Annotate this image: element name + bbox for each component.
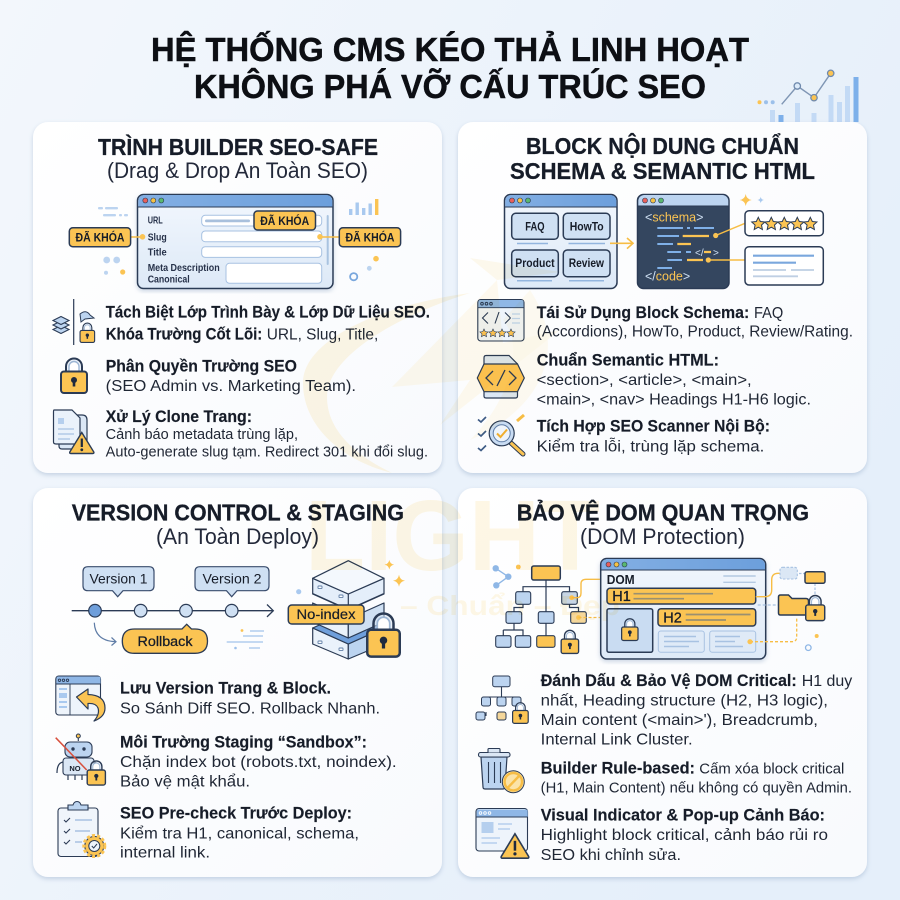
chart decoration: top right bbox=[758, 70, 858, 122]
icon: trash with prohibition bbox=[478, 748, 524, 793]
illustration: version timeline bbox=[72, 567, 273, 653]
illustration: locked SEO fields window: URL bbox=[148, 214, 163, 226]
text: builder rule-based bbox=[541, 759, 852, 797]
text: chuẩn semantic: <main>, <nav> Headings H1-H6 logic. bbox=[537, 391, 811, 408]
heading: panel 2: SCHEMA & SEMANTIC HTML bbox=[510, 158, 815, 184]
illustration: no-index server bbox=[288, 560, 405, 659]
text: phân quyền: (SEO Admin vs. Marketing Team). bbox=[106, 378, 356, 395]
text: tái sử dụng block: FAQ bbox=[754, 305, 783, 322]
icon: server lock bbox=[367, 614, 400, 657]
text: đánh dấu dom critical bbox=[541, 672, 852, 748]
bubble: version 2 bbox=[195, 567, 269, 597]
heading: panel 2: BLOCK NỘI DUNG CHUẨN bbox=[526, 132, 799, 159]
illustration: locked SEO fields window: Meta Description bbox=[148, 262, 220, 274]
heading: panel 3: VERSION CONTROL & STAGING bbox=[72, 500, 404, 526]
text: môi trường staging: Bảo vệ mật khẩu. bbox=[120, 773, 250, 791]
item: đánh dấu dom critical bbox=[476, 672, 852, 748]
block: h2: H2 bbox=[663, 610, 682, 626]
item: tích hợp scanner bbox=[478, 415, 770, 456]
block window: FAQ bbox=[525, 220, 545, 234]
text preview box bbox=[745, 247, 823, 285]
bubble: version 2: Version 2 bbox=[202, 571, 262, 586]
text: builder rule-based: (H1, Main Content) nếu không có quyền Admin. bbox=[541, 781, 852, 797]
button: rollback bbox=[122, 624, 208, 653]
text: tái sử dụng block: (Accordions), HowTo, Product, Review/Rating. bbox=[537, 324, 853, 341]
text: đánh dấu dom critical: Internal Link Cluster. bbox=[541, 731, 693, 748]
badge: no-index: No-index bbox=[296, 607, 356, 622]
text: lưu version bbox=[120, 679, 380, 717]
text: tích hợp scanner: Kiểm tra lỗi, trùng lặp schema. bbox=[537, 437, 764, 456]
block window: Review bbox=[569, 256, 605, 270]
title: HỆ THỐNG CMS KÉO THẢ LINH HOẠT bbox=[151, 30, 749, 68]
illustration: locked SEO fields window: Title bbox=[148, 246, 167, 258]
title bbox=[151, 30, 749, 105]
code window: </ bbox=[695, 248, 704, 259]
text: xử lý clone: Xử Lý Clone Trang: bbox=[106, 408, 252, 426]
illustration: protected folder bbox=[747, 567, 825, 650]
block: h1 bbox=[607, 588, 756, 605]
icon: schema window bbox=[478, 300, 524, 341]
text: xử lý clone: Auto-generate slug tạm. Redirect 301 khi đổi slug. bbox=[106, 445, 428, 461]
code window: > bbox=[713, 248, 719, 259]
icon: blocked robot with lock: NO bbox=[69, 764, 81, 773]
heading: panel 2 bbox=[510, 132, 815, 184]
item: lưu version bbox=[56, 676, 380, 721]
icon: window with undo arrow bbox=[56, 676, 105, 721]
icon: blocked robot with lock bbox=[56, 734, 105, 785]
illustration: schema blocks to code bbox=[504, 194, 823, 288]
text: phân quyền bbox=[106, 358, 356, 395]
text: visual indicator: Visual Indicator & Pop-up Cảnh Báo: bbox=[541, 806, 825, 824]
text: seo pre-check bbox=[120, 804, 359, 862]
panel: version control & staging bbox=[33, 488, 442, 877]
text: visual indicator: SEO khi chỉnh sửa. bbox=[541, 847, 681, 864]
panel: block nội dung chuẩn bbox=[458, 122, 867, 473]
watermark: logo: – Chuẩn – Đẹp bbox=[400, 590, 620, 621]
text: lưu version: Lưu Version Trang & Block. bbox=[120, 679, 331, 697]
code window: </code> bbox=[645, 270, 690, 284]
code window bbox=[638, 194, 729, 288]
arrow: blocks to code bbox=[610, 238, 633, 249]
text: lưu version: So Sánh Diff SEO. Rollback Nhanh. bbox=[120, 700, 380, 717]
icon: semantic html document bbox=[477, 356, 524, 398]
text: tách biệt lớp bbox=[106, 304, 430, 343]
panel: bảo vệ dom bbox=[458, 488, 867, 877]
icon: padlock bbox=[61, 358, 87, 393]
watermark: logo bbox=[303, 258, 620, 621]
text: tái sử dụng block bbox=[537, 304, 853, 341]
block window: Product bbox=[515, 256, 555, 270]
block: h2 bbox=[658, 609, 756, 626]
item: tách biệt lớp bbox=[53, 299, 430, 345]
text: tích hợp scanner: Tích Hợp SEO Scanner Nội Bộ: bbox=[537, 418, 770, 436]
bubble: version 1 bbox=[83, 567, 154, 597]
text: visual indicator bbox=[541, 806, 828, 864]
text: seo pre-check: internal link. bbox=[120, 845, 210, 862]
icon: window with warning bbox=[476, 808, 529, 858]
text: môi trường staging bbox=[120, 734, 397, 791]
text: chuẩn semantic bbox=[537, 352, 811, 408]
text: đánh dấu dom critical: H1 duy bbox=[802, 673, 852, 690]
icon: layers and lock bbox=[53, 299, 95, 345]
illustration: locked SEO fields window: ĐÃ KHÓA bbox=[346, 230, 395, 245]
heading: panel 1 bbox=[98, 133, 378, 183]
item: phân quyền bbox=[61, 358, 356, 395]
illustration: dom tree bbox=[492, 565, 603, 653]
item: visual indicator bbox=[476, 806, 828, 864]
illustration: dom window: DOM bbox=[607, 572, 635, 587]
text: tái sử dụng block: Tái Sử Dụng Block Schema: bbox=[537, 304, 749, 322]
item: xử lý clone bbox=[54, 408, 428, 461]
block: h1: H1 bbox=[612, 589, 631, 605]
text: chuẩn semantic: Chuẩn Semantic HTML: bbox=[537, 352, 719, 370]
icon: tree with lock bbox=[476, 676, 528, 723]
text: seo pre-check: Kiểm tra H1, canonical, schema, bbox=[120, 824, 359, 842]
heading: panel 3: (An Toàn Deploy) bbox=[156, 524, 319, 549]
text: môi trường staging: Môi Trường Staging “Sandbox”: bbox=[120, 734, 367, 752]
icon: magnifier with checks bbox=[478, 415, 524, 454]
block window bbox=[504, 194, 617, 288]
heading: panel 1: (Drag & Drop An Toàn SEO) bbox=[107, 158, 368, 183]
illustration: locked SEO fields window: Slug bbox=[148, 232, 167, 244]
button: rollback: Rollback bbox=[138, 634, 193, 649]
text: visual indicator: Highlight block critical, cảnh báo rủi ro bbox=[541, 827, 828, 844]
text: môi trường staging: Chặn index bot (robots.txt, noindex). bbox=[120, 754, 397, 771]
panel: trình builder seo-safe bbox=[33, 122, 442, 473]
illustration: dom window bbox=[601, 558, 766, 659]
text: tách biệt lớp: Tách Biệt Lớp Trình Bày & Lớp Dữ Liệu SEO. bbox=[106, 304, 430, 322]
arrow: rollback curve bbox=[94, 623, 116, 646]
text: tích hợp scanner bbox=[537, 418, 770, 456]
heading: panel 4 bbox=[517, 498, 809, 549]
text: đánh dấu dom critical: Main content (<main>'), Breadcrumb, bbox=[541, 712, 818, 729]
text: xử lý clone bbox=[106, 408, 428, 461]
bubble: version 1: Version 1 bbox=[90, 571, 148, 586]
illustration: locked SEO fields window bbox=[69, 194, 401, 288]
text: tách biệt lớp: Khóa Trường Cốt Lõi: bbox=[106, 325, 262, 343]
code window: <schema> bbox=[645, 211, 703, 225]
icon: clipboard with gear bbox=[58, 802, 105, 856]
heading: panel 4: (DOM Protection) bbox=[580, 524, 745, 549]
heading: panel 4: BẢO VỆ DOM QUAN TRỌNG bbox=[517, 498, 809, 526]
watermark: logo: LIGHT bbox=[305, 480, 600, 592]
text: seo pre-check: SEO Pre-check Trước Deploy: bbox=[120, 804, 352, 822]
item: môi trường staging bbox=[56, 734, 397, 791]
item: builder rule-based bbox=[478, 748, 852, 797]
text: xử lý clone: Cảnh báo metadata trùng lặp, bbox=[106, 427, 298, 443]
illustration: locked SEO fields window: ĐÃ KHÓA bbox=[76, 230, 125, 245]
text: đánh dấu dom critical: nhất, Heading structure (H2, H3 logic), bbox=[541, 693, 828, 710]
text: chuẩn semantic: <section>, <article>, <main>, bbox=[537, 372, 752, 389]
item: seo pre-check bbox=[58, 802, 359, 862]
block: locked content bbox=[607, 609, 653, 652]
illustration: locked SEO fields window: Canonical bbox=[148, 274, 190, 286]
item: tái sử dụng block bbox=[478, 300, 853, 341]
heading: panel 3 bbox=[72, 500, 404, 549]
item: chuẩn semantic bbox=[477, 352, 811, 408]
connectors bbox=[706, 194, 764, 263]
icon: documents with warning bbox=[54, 410, 94, 454]
text: builder rule-based: Cấm xóa block critical bbox=[699, 761, 844, 777]
title: KHÔNG PHÁ VỠ CẤU TRÚC SEO bbox=[194, 67, 706, 105]
illustration: locked SEO fields window: ĐÃ KHÓA bbox=[260, 213, 309, 228]
star rating box bbox=[745, 211, 823, 236]
block window: HowTo bbox=[570, 220, 604, 234]
text: builder rule-based: Builder Rule-based: bbox=[541, 759, 695, 777]
heading: panel 1: TRÌNH BUILDER SEO-SAFE bbox=[98, 133, 378, 160]
text: phân quyền: Phân Quyền Trường SEO bbox=[106, 358, 297, 376]
text: tách biệt lớp: URL, Slug, Title, bbox=[267, 326, 378, 343]
text: đánh dấu dom critical: Đánh Dấu & Bảo Vệ DOM Critical: bbox=[541, 672, 797, 690]
